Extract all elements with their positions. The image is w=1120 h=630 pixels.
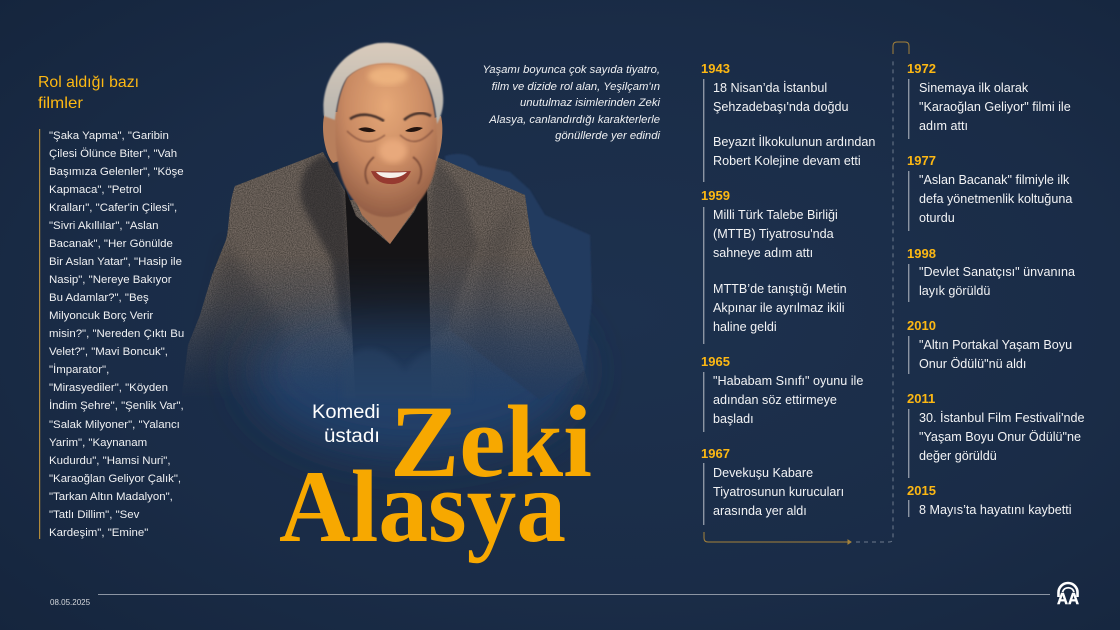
films list: Bacanak", "Her Gönülde — [49, 238, 173, 250]
intro quote: Yaşamı boyunca çok sayıda tiyatro, — [482, 64, 660, 76]
entry 1965: 1965 — [701, 354, 730, 369]
entry 1977: oturdu — [919, 211, 955, 225]
title: Zeki Alasya — [279, 385, 592, 563]
portrait ears — [323, 112, 442, 163]
films list: "Karaoğlan Geliyor Çalık", — [49, 473, 181, 485]
entry 1967 — [701, 446, 844, 525]
subtitle: Komedi üstadı — [312, 402, 380, 447]
entry 1943: Robert Kolejine devam etti — [713, 154, 861, 168]
entry 1998: 1998 — [907, 246, 936, 261]
entry 1943: Beyazıt İlkokulunun ardından — [713, 135, 875, 149]
portrait: Zeki Alasya — [184, 42, 586, 377]
entry 2015 — [907, 483, 1072, 517]
entry 2011: değer görüldü — [919, 449, 997, 463]
films list: Velet?", "Mavi Boncuk", — [49, 346, 168, 358]
entry 1959 — [701, 188, 847, 344]
portrait eyes — [358, 127, 423, 132]
films list: Bu Adamlar?", "Beş — [49, 292, 149, 304]
films list: misin?", "Nereden Çıktı Bu — [49, 328, 184, 340]
entry 1959: haline geldi — [713, 320, 777, 334]
films accent bar — [39, 129, 40, 539]
films list: Nasip", "Nereye Bakıyor — [49, 274, 172, 286]
watercolor blot: right side — [445, 154, 592, 400]
icon: AA logo — [1057, 583, 1079, 608]
portrait left sleeve shadow — [210, 248, 277, 344]
portrait hands silhouette — [342, 349, 470, 400]
entry 1943: Şehzadebaşı'nda doğdu — [713, 100, 848, 114]
films list: İndim Şehre", "Şenlik Var", — [49, 399, 184, 412]
entry 1972 — [907, 61, 1071, 139]
entry 2011: 30. İstanbul Film Festivali'nde — [919, 411, 1084, 425]
films list: Bir Aslan Yatar", "Hasip ile — [49, 256, 182, 268]
portrait cheek lines — [365, 157, 421, 184]
timeline column 2 — [907, 61, 1084, 517]
title: Zeki Alasya: Alasya — [279, 450, 566, 563]
entry 1943: 18 Nisan’da İstanbul — [713, 81, 827, 95]
subtitle: Komedi üstadı: üstadı — [324, 426, 380, 447]
entry 1977 — [907, 153, 1072, 231]
entry 1977: 1977 — [907, 153, 936, 168]
portrait hair — [323, 43, 443, 124]
entry 2015: 8 Mayıs’ta hayatını kaybetti — [919, 503, 1072, 517]
entry 1959: sahneye adım attı — [713, 246, 813, 260]
entry 2010 — [907, 318, 1072, 374]
entry 1977: "Aslan Bacanak" filmiyle ilk — [919, 173, 1070, 187]
timeline connector — [704, 42, 909, 544]
watercolor wash: lower — [250, 285, 580, 455]
entry 2011 — [907, 391, 1084, 478]
portrait mouth — [371, 171, 411, 184]
films list: Kudurdu", "Hamsi Nuri", — [49, 455, 171, 467]
entry 1998 — [907, 246, 1075, 302]
films list: Kralları", "Cafer'in Çilesi", — [49, 202, 177, 214]
films list: Çilesi Ölünce Biter", "Vah — [49, 148, 177, 160]
footer line — [98, 594, 1050, 595]
films list: "Tarkan Altın Madalyon", — [49, 491, 173, 503]
entry 2010: "Altın Portakal Yaşam Boyu — [919, 338, 1072, 352]
entry 1943 — [701, 61, 875, 182]
films list: "Şaka Yapma", "Garibin — [49, 130, 169, 142]
portrait left lapel shadow — [300, 155, 356, 345]
intro quote: unutulmaz isimlerinden Zeki — [520, 97, 660, 109]
films list: Milyoncuk Borç Verir — [49, 310, 153, 322]
entry 1959: Milli Türk Talebe Birliği — [713, 208, 838, 222]
portrait shirt — [345, 188, 430, 371]
timeline column 1 — [701, 61, 875, 525]
entry 1967: arasında yer aldı — [713, 504, 807, 518]
intro quote — [482, 64, 660, 142]
entry 1967: 1967 — [701, 446, 730, 461]
entry 2010: Onur Ödülü"nü aldı — [919, 357, 1026, 371]
entry 1972: Sinemaya ilk olarak — [919, 81, 1029, 95]
films list: Başımıza Gelenler", "Köşe — [49, 166, 184, 178]
entry 1965 — [701, 354, 863, 432]
films heading — [38, 74, 139, 112]
portrait brows — [350, 113, 431, 121]
portrait eye bags — [347, 130, 433, 142]
portrait nose — [379, 139, 407, 163]
portrait forehead highlight — [368, 67, 408, 85]
icon: AA logo: AA — [1057, 591, 1079, 608]
entry 1977: defa yönetmenlik koltuğuna — [919, 192, 1072, 206]
intro quote: Alasya, canlandırdığı karakterlerle — [488, 114, 660, 126]
portrait jacket — [184, 152, 586, 378]
entry 2011: 2011 — [907, 391, 935, 406]
entry 1967: Devekuşu Kabare — [713, 466, 813, 480]
entry 1967: Tiyatrosunun kurucuları — [713, 485, 844, 499]
entry 1965: adından söz ettirmeye — [713, 393, 837, 407]
entry 1965: "Hababam Sınıfı" oyunu ile — [713, 374, 863, 388]
films heading: Rol aldığı bazı — [38, 74, 139, 91]
intro quote: gönüllerde yer edindi — [555, 130, 660, 142]
portrait right sleeve shadow — [479, 218, 514, 317]
entry 1998: "Devlet Sanatçısı" ünvanına — [919, 265, 1075, 279]
films list: "Salak Milyoner", "Yalancı — [49, 419, 180, 431]
date: 08.05.2025 — [50, 598, 91, 607]
portrait face — [335, 63, 437, 217]
films list: Kapmaca", "Petrol — [49, 184, 142, 196]
entry 1959: Akpınar ile ayrılmaz ikili — [713, 301, 845, 315]
entry 1972: "Karaoğlan Geliyor" filmi ile — [919, 100, 1071, 114]
entry 1959: MTTB’de tanıştığı Metin — [713, 282, 847, 296]
films list: "Mirasyediler", "Köyden — [49, 382, 168, 394]
films heading: filmler — [38, 95, 84, 112]
films list — [49, 130, 184, 539]
intro quote: film ve dizide rol alan, Yeşilçam'ın — [492, 81, 660, 93]
films list: "Sivri Akıllılar", "Aslan — [49, 220, 158, 232]
entry 1959: (MTTB) Tiyatrosu'nda — [713, 227, 834, 241]
portrait teeth — [376, 172, 407, 178]
films list: Yarim", "Kaynanam — [49, 437, 147, 449]
films list: "İmparator", — [49, 363, 109, 376]
title: Zeki Alasya: Zeki — [390, 385, 592, 498]
entry 1943: 1943 — [701, 61, 730, 76]
entry 1959: 1959 — [701, 188, 730, 203]
portrait right lapel shadow — [428, 160, 478, 340]
films list: Kardeşim", "Emine" — [49, 527, 148, 539]
entry 1972: 1972 — [907, 61, 936, 76]
entry 1965: başladı — [713, 412, 754, 426]
subtitle: Komedi üstadı: Komedi — [312, 402, 380, 423]
entry 1972: adım attı — [919, 119, 968, 133]
portrait neck — [356, 202, 418, 244]
entry 2010: 2010 — [907, 318, 936, 333]
entry 2011: "Yaşam Boyu Onur Ödülü"ne — [919, 430, 1081, 444]
entry 2015: 2015 — [907, 483, 936, 498]
entry 1998: layık görüldü — [919, 284, 990, 298]
films list: "Tatlı Dillim", "Sev — [49, 509, 140, 521]
